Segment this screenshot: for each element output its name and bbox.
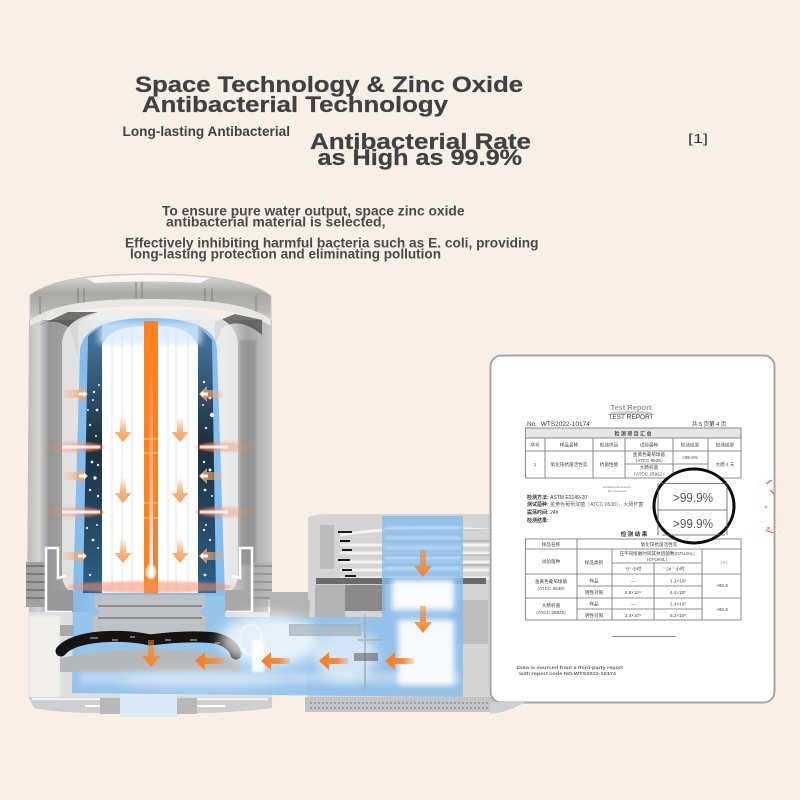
summary table: 1 [534,462,537,467]
method notes: 测试菌种: 金黄色葡萄球菌（ATCC 6538），大肠杆菌 [527,501,643,508]
inner glass shell [62,310,238,596]
method notes: Test Insurance [607,489,627,493]
magnifier circle: >99.9% [673,516,713,531]
results table: （ATCC 6538） [535,586,567,591]
subheading: long-lasting antibacterial: Long-lasting Antibacterial [122,124,290,139]
heading: antibacterial rate: as High as 99.9% [318,145,522,170]
results table: >99.9 [716,583,728,588]
magnifier circle: >99.9% [673,490,713,505]
downward arrows in filter [114,417,188,563]
shadow smear at card corner [490,702,525,714]
results table: 试验菌种 [542,558,561,565]
summary table: （ATCC 6538） [633,458,665,463]
method notes: 检测结果: [527,517,549,524]
heading: antibacterial rate [310,129,531,170]
signature line [612,636,676,637]
blue water channel [60,516,463,697]
heading: antibacterial rate: Antibacterial Rate [310,129,531,154]
results table: — [631,578,636,584]
red stamp fragment [766,480,774,533]
pleated filter [98,322,202,593]
test report card [490,356,774,702]
main title: Antibacterial Technology [142,92,449,117]
report number: No. WTS2022-10174 [527,421,590,428]
connector pipe [270,592,320,622]
results table: 样品 [589,578,599,584]
description text: To ensure pure water output, space zinc oxide [162,204,465,218]
results table: 阴性对照 [585,612,604,619]
results table: 检 测 结 果 [621,530,648,538]
results table: (ATCC 25922) [536,610,566,615]
description text: long-lasting protection and eliminating pollution [130,246,441,262]
summary table: >99.9% [682,455,698,460]
faucet adapter right [305,514,495,712]
results table: (%) [720,560,728,565]
main title: Space Technology & Zinc Oxide [135,72,523,97]
description text [125,204,538,262]
method notes [527,485,643,524]
results table: 氧化锌抗菌活性炭 [641,541,678,548]
blue water capsule [73,318,225,596]
results table: 在不同接触时间其抗后菌数(CFU/mL) [619,550,695,557]
data source note: with report code NO.WTS2022-10174 [518,671,616,677]
results table: 4.4×10⁵ [670,590,686,595]
results table: 大肠杆菌 [542,602,561,609]
white water wash areas [80,672,460,684]
description text: Effectively inhibiting harmful bacteria such as E. coli, providing [125,236,538,250]
summary table [526,428,741,478]
summary table: 检 测 项 目 汇 总 [615,430,651,438]
results table: 样品名称 [542,541,561,548]
results table: （CFU/mL） [644,557,670,562]
carbon speckles [86,381,214,576]
summary table: 检测结果 [681,442,700,448]
cylinder body [27,320,272,695]
black seal ring [61,636,236,654]
description text: antibacterial material is selected, [166,214,386,230]
summary table: 大肠杆菌 [640,464,659,471]
summary table: 序号 [530,442,540,448]
summary table: 金黄色葡萄球菌 [633,451,665,458]
summary table: 检测结果 [716,442,735,448]
results table: 1.1×10² [670,578,686,584]
report heading: Test Report [610,403,652,412]
summary table: 大肠 4 天 [716,461,735,468]
data source note: Data is sourced from a third-party report [517,665,623,671]
data source note [517,665,623,677]
report number: 共 5 页第 4 页 [692,420,727,428]
report heading: TEST REPORT [608,414,654,421]
results table: 样品 [589,600,599,608]
internal pipe parts [290,615,382,690]
method notes: 震荡时间: 24h [527,509,559,516]
results table: >99.9 [716,607,728,612]
method notes: Antibacterial Property [603,485,632,489]
inward arrows [63,386,223,564]
orange flow arrows [142,550,432,670]
summary table: 样品名称 [560,442,579,448]
results table: 1.4×10² [670,602,686,606]
summary table: 检测项目 [600,442,618,448]
lower housing [26,548,272,714]
results table: 5.2×10⁵ [670,613,686,618]
magnifier circle [654,469,734,543]
main title [135,72,523,117]
results table: 2.8×10⁴ [625,590,641,595]
summary table: 试验菌种 [640,442,659,448]
footnote marker: [1] [688,131,708,146]
results table: 阴性对照 [585,589,604,596]
report heading [608,403,654,421]
results table: "0" 小时 [625,566,642,572]
method notes: 检测方法: ASTM E2149-20 [527,494,587,501]
outlet water stream [120,694,177,717]
report number [527,420,727,428]
dark inner wall right [240,340,256,565]
results table: 样品类别 [585,559,604,566]
faucet filter left cylinder [27,274,272,695]
results table: — [631,602,636,606]
lower chamber [60,649,240,672]
results table: 金黄色葡萄球菌 [535,578,567,585]
disc stack [93,595,206,636]
summary table: 抗菌性能 [600,461,619,468]
results table: " 24 " 小时 [663,566,685,572]
top cap [30,274,271,323]
results table [526,530,741,620]
summary table: （ATCC 25922） [631,472,667,476]
glow rings [41,442,259,593]
results table: 3.4×10⁴ [625,613,641,618]
summary table: 氧化锌抗菌活性炭 [551,461,588,468]
orange core bar [144,321,158,593]
activated carbon layer right [198,325,216,593]
activated carbon layer left [83,325,102,593]
